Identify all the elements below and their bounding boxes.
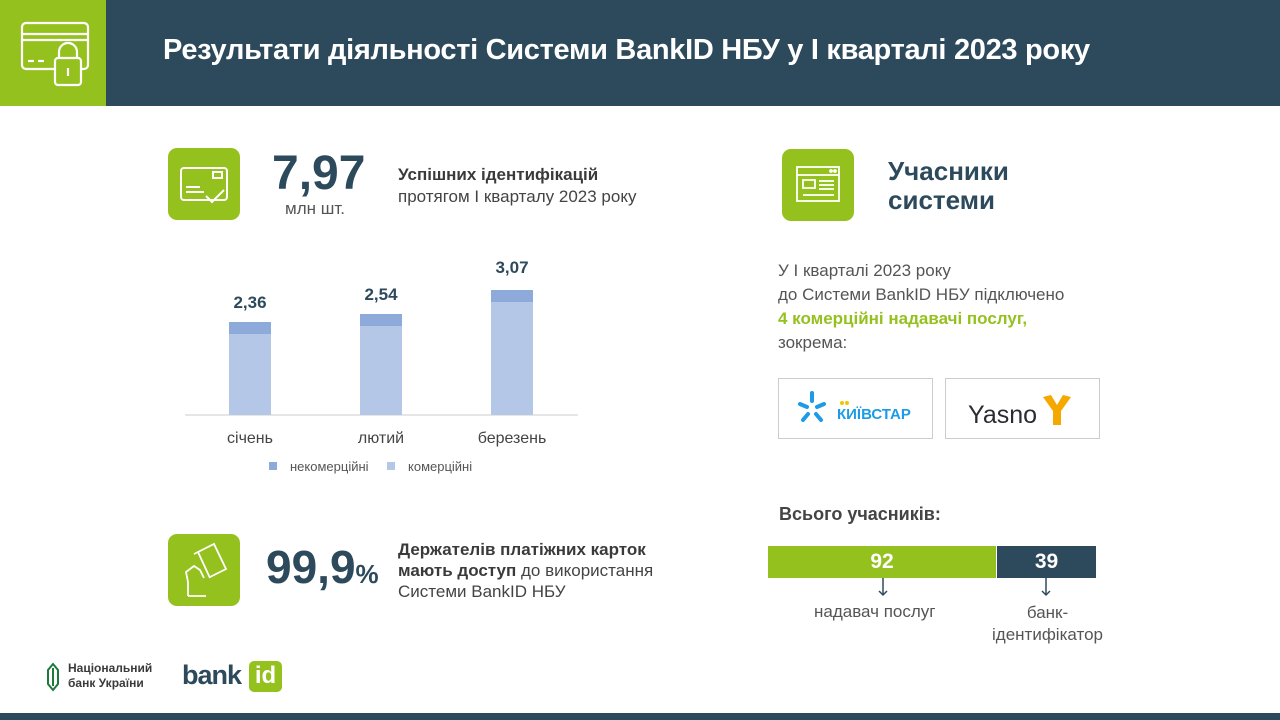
icon: card check xyxy=(168,148,240,220)
bar chart: лютий xyxy=(358,430,404,447)
stacked bar: participants xyxy=(768,546,1096,578)
icon: hand with card xyxy=(168,534,240,606)
logo: NBU xyxy=(47,661,152,692)
logo: bankid xyxy=(182,660,282,692)
title: Результати діяльності Системи BankID НБУ у I кварталі 2023 року xyxy=(163,34,1090,66)
description: Успішних ідентифікацій xyxy=(398,165,598,184)
heading: Учасники xyxy=(888,156,1009,186)
logo: yasno xyxy=(945,378,1100,439)
description: мають доступ до використання xyxy=(398,561,653,580)
description: Держателів платіжних карток xyxy=(398,540,646,559)
bar chart xyxy=(185,258,578,474)
logo: bankid: id xyxy=(255,662,276,689)
logo: kyivstar: КИЇВСТАР xyxy=(837,406,911,423)
arrows xyxy=(878,578,1050,596)
heading: системи xyxy=(888,185,995,215)
description: Системи BankID НБУ xyxy=(398,582,566,601)
footer bar xyxy=(0,713,1280,720)
text block: У I кварталі 2023 року xyxy=(778,261,951,280)
bar chart: комерційні xyxy=(408,459,472,474)
text block: зокрема: xyxy=(778,333,847,352)
text block: 4 комерційні надавачі послуг, xyxy=(778,309,1027,328)
logo: NBU: банк України xyxy=(68,676,144,690)
logo: NBU: Національний xyxy=(68,661,152,675)
labels: надавач послуг xyxy=(814,602,936,621)
bar chart: 3,07 xyxy=(495,258,529,277)
description xyxy=(398,165,636,206)
bar chart: січень xyxy=(227,430,273,447)
text: ідентифікатор xyxy=(992,625,1103,644)
bar chart: березень xyxy=(478,430,546,447)
panel: identifications: млн шт. xyxy=(285,199,345,218)
big percent: 99,9% xyxy=(266,541,379,593)
icon: card with lock xyxy=(0,0,106,106)
panel: participants xyxy=(778,149,1064,352)
icon: browser window xyxy=(782,149,854,221)
bar chart: 2,36 xyxy=(233,293,267,312)
logo: kyivstar xyxy=(778,378,933,439)
panel: identifications xyxy=(168,147,636,220)
header bar xyxy=(0,0,1280,106)
logo: yasno: Yasno xyxy=(968,401,1037,429)
text: банк- xyxy=(1027,603,1068,622)
heading xyxy=(888,156,1009,215)
text block: до Системи BankID НБУ підключено xyxy=(778,285,1064,304)
text block xyxy=(778,261,1064,352)
panel: card holders xyxy=(168,534,653,606)
stacked bar: participants: 39 xyxy=(1035,550,1058,573)
heading: total participants: Всього учасників: xyxy=(779,504,941,524)
stacked bar: participants: 92 xyxy=(870,550,894,573)
bar chart: некомерційні xyxy=(290,459,369,474)
logo: bankid: bank xyxy=(182,660,241,690)
description: протягом I кварталу 2023 року xyxy=(398,187,636,206)
bar chart: 2,54 xyxy=(364,285,398,304)
big number: 7,97 xyxy=(272,147,365,200)
description xyxy=(398,540,653,601)
